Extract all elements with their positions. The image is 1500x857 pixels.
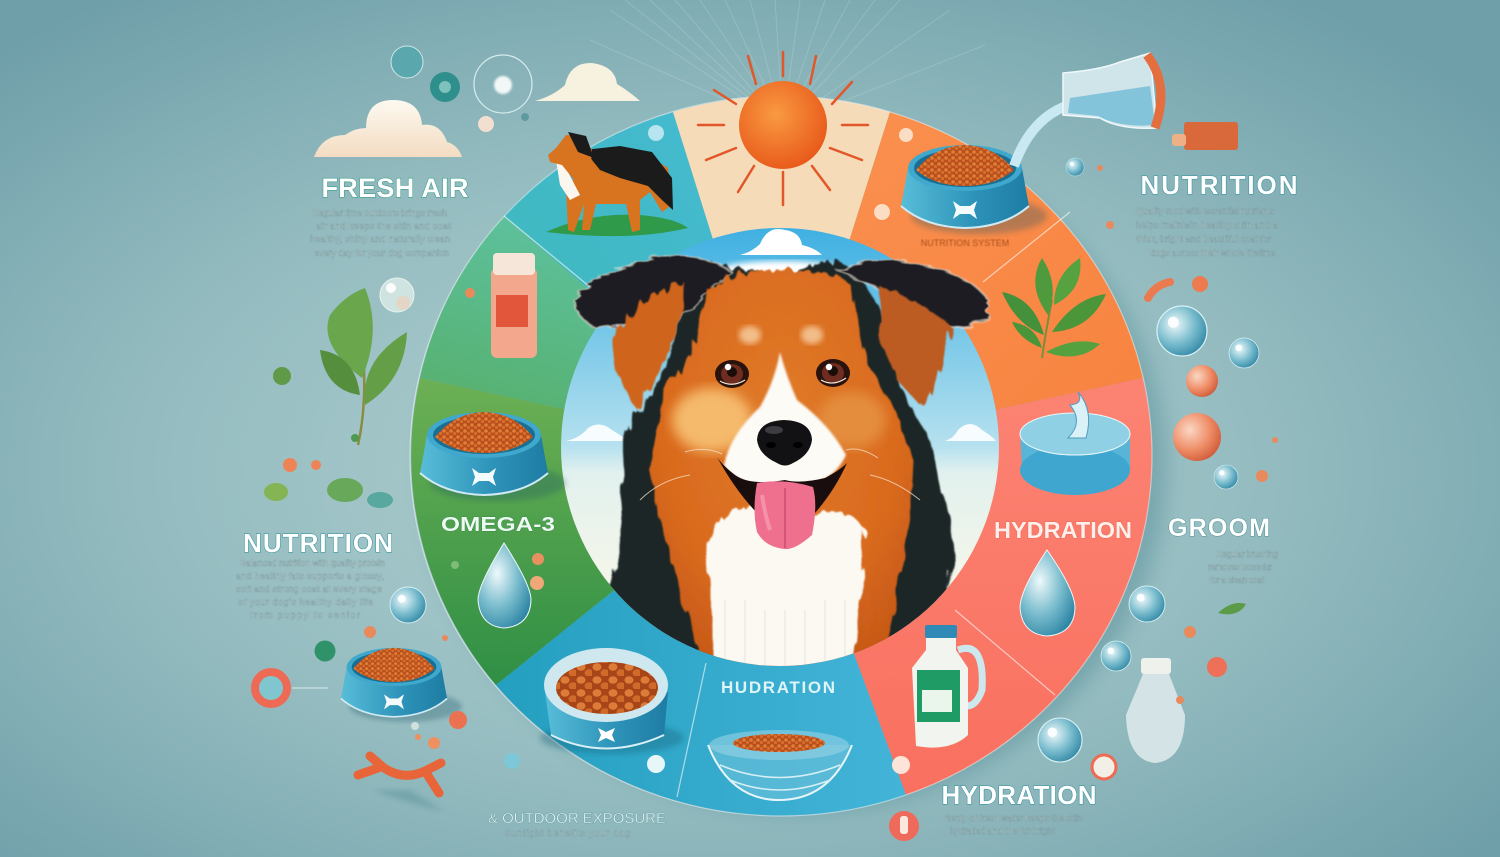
label: hydration on blue segment: HUDRATION [721, 678, 835, 697]
icon: water drop left [478, 543, 531, 628]
body text: groom [1208, 549, 1278, 585]
body text: fresh air: healthy, shiny and naturally clean [310, 234, 450, 244]
icon: green dot [314, 640, 336, 662]
left fur wing [615, 283, 685, 410]
icon: bowl on green segment [420, 412, 566, 501]
body text: nutrition right: Quality food with essential nutrients [1136, 206, 1274, 216]
heading: outdoor exposure: & OUTDOOR EXPOSURE [488, 810, 666, 827]
sun icon [698, 52, 868, 205]
icon: orange bottle [1172, 122, 1238, 150]
panel: groom [1168, 514, 1278, 585]
body text: hydration bottom: hydrated and the fur bright [950, 826, 1055, 836]
panel: hydration bottom [942, 780, 1096, 836]
body text: groom: Regular brushing [1216, 549, 1278, 559]
label: hydration on wheel: HYDRATION [994, 517, 1132, 543]
tongue [754, 481, 815, 549]
icon: orbs top left [391, 46, 532, 132]
icon: small scattered dots [364, 125, 1278, 774]
body text: nutrition right: thick, bright and beautiful coat for [1136, 234, 1271, 244]
icon: water bowl bottom center [708, 730, 852, 800]
body text: nutrition left: soft and strong coat at every stage [236, 584, 382, 594]
icon: water drop right [1020, 550, 1075, 636]
body text: nutrition right [1136, 206, 1278, 258]
segment: nutrition orange [781, 112, 1143, 456]
body text: nutrition left: from puppy to senior [250, 610, 360, 620]
icon: glass bottle [1126, 658, 1185, 763]
heading: nutrition right: NUTRITION [1140, 170, 1298, 200]
body text: nutrition left: of your dog's healthy daily life [238, 597, 373, 607]
nose [757, 420, 812, 466]
circular wheel [410, 96, 1167, 816]
segment: hydration salmon [781, 378, 1152, 795]
body text: nutrition right: helps maintain healthy skin and a [1136, 220, 1278, 230]
icon: bone treat [358, 756, 445, 812]
icon: cloud left [314, 100, 462, 157]
icon: herb leaves [1002, 258, 1106, 358]
segment: supplement light green [420, 216, 781, 456]
icon: supplement jug [912, 625, 982, 748]
icon: small cloud top [535, 63, 640, 101]
heading: hydration bottom: HYDRATION [942, 780, 1096, 810]
body text: nutrition left [236, 558, 385, 620]
body text: fresh air: air and keeps the skin and coat [316, 221, 451, 231]
panel: outdoor exposure [488, 810, 666, 838]
icon: bubble lower left [390, 587, 426, 623]
body text: groom: removes loose fur [1208, 562, 1272, 572]
icon: bubble left [380, 278, 414, 312]
right fur wing [880, 287, 952, 407]
body text: nutrition left: and healthy fats supports a glossy, [236, 571, 384, 581]
segment: sunlight beige [673, 96, 890, 456]
icon: water bowl [1020, 392, 1130, 495]
icon: clouds in portrait [566, 229, 996, 441]
dog head halo [721, 259, 834, 274]
icon: target ring [255, 672, 328, 704]
icon: water bubbles right [1038, 158, 1259, 779]
body text: fresh air [310, 208, 451, 258]
background sun rays [590, 0, 985, 125]
icon: supplement jar [491, 253, 537, 358]
heading: fresh air: FRESH AIR [322, 173, 468, 203]
panel: nutrition left [236, 528, 393, 620]
icon: small foliage and dots [264, 367, 393, 508]
white chest [705, 505, 865, 680]
body text: groom: for a clean coat [1210, 575, 1264, 585]
dog face and neck [650, 270, 913, 680]
eyes [715, 359, 850, 388]
dog black outer fur [610, 260, 953, 680]
inner dog portrait circle [561, 228, 999, 680]
cheek tan patches [672, 326, 886, 452]
body text: hydration bottom [942, 813, 1082, 836]
body text: hydration bottom: Plenty of fresh water keeps the skin [942, 813, 1082, 823]
body text: fresh air: Regular time outdoors brings fresh [312, 208, 447, 218]
label: omega-3: OMEGA-3 [441, 514, 555, 536]
heading: nutrition left: NUTRITION [243, 528, 393, 558]
icon: kibble bowl bottom [540, 648, 684, 754]
body text: nutrition right: dogs across their whole lifetime [1150, 248, 1275, 258]
body text: nutrition left: Balanced nutrition with quality protein [240, 558, 385, 568]
dog muzzle and features [640, 352, 920, 549]
icon: pitcher pouring water [1014, 53, 1161, 166]
panel: nutrition right [1136, 170, 1298, 258]
icon: large leaf left [320, 288, 407, 445]
body text: outdoor exposure: Sunlight benefits your dog [505, 828, 630, 838]
mouth [717, 457, 847, 513]
icon: bowl lower left [341, 648, 462, 722]
icon: nutrition bowl top right [901, 145, 1047, 234]
panel: fresh air [310, 100, 468, 258]
body text: fresh air: every day for your dog companion [314, 248, 449, 258]
segment: fresh air teal [504, 112, 781, 456]
white muzzle and blaze [724, 352, 846, 486]
heading: groom: GROOM [1168, 514, 1270, 542]
small nutrition caption on wheel: NUTRITION SYSTEM [921, 238, 1009, 248]
segment: omega-3 green [411, 378, 781, 685]
icon: small red dots [411, 711, 520, 769]
segment: food blue [496, 456, 906, 816]
icon: dog on grass [546, 132, 688, 236]
dog ears [575, 255, 988, 410]
icon: red badge [889, 811, 919, 841]
